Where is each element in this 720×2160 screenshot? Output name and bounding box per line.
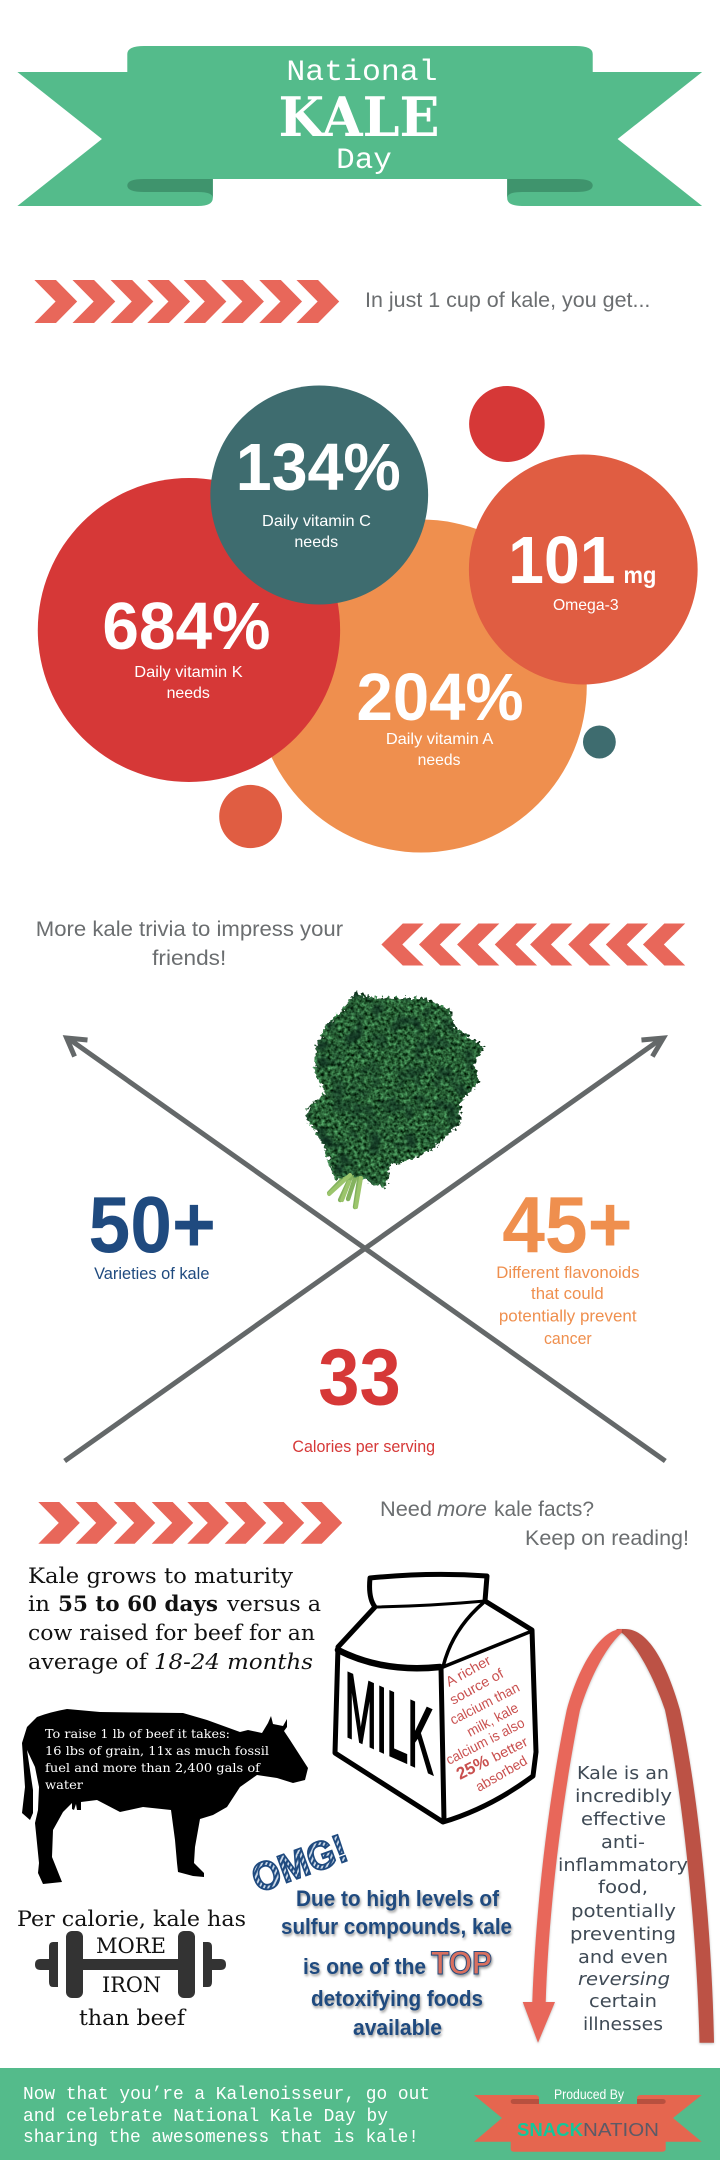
OMG callout: OMG! xyxy=(246,1827,353,1901)
cow text: To raise 1 lb of beef it takes: xyxy=(45,1727,230,1741)
arc text: inflammatory xyxy=(558,1855,688,1876)
cow text: fuel and more than 2,400 gals of xyxy=(45,1761,262,1775)
iron comparison xyxy=(17,1907,246,2030)
arc text: incredibly xyxy=(575,1786,672,1807)
producer ribbon xyxy=(474,2086,702,2152)
stat: flavonoids: potentially prevent xyxy=(499,1306,637,1326)
crossed arrows xyxy=(65,1038,665,1461)
anti-inflammatory arc arrow xyxy=(523,1629,714,2043)
producer ribbon: NATION xyxy=(583,2120,659,2140)
arc text: preventing xyxy=(570,1924,676,1945)
bubble: omega-3: Omega-3 xyxy=(553,597,619,614)
iron text top: Per calorie, kale has xyxy=(17,1907,246,1931)
bubble: vitamin C: Daily vitamin C xyxy=(262,513,371,530)
detox text xyxy=(281,1886,512,2040)
cow text: water xyxy=(45,1778,83,1792)
kale leaves xyxy=(306,992,484,1187)
stat: calories: 33 xyxy=(318,1333,401,1422)
calcium note: 25% xyxy=(453,1751,492,1784)
calcium note xyxy=(443,1652,531,1795)
more facts heading: Need xyxy=(380,1498,432,1521)
footer text: sharing the awesomeness that is kale! xyxy=(23,2128,419,2148)
trivia heading xyxy=(36,918,343,970)
kale stems xyxy=(329,1160,362,1207)
stat: calories: Calories per serving xyxy=(292,1437,435,1456)
bubble: vitamin A: Daily vitamin A xyxy=(386,731,494,748)
trivia heading: friends! xyxy=(152,947,226,970)
title banner xyxy=(17,46,702,206)
footer xyxy=(0,2068,720,2160)
text: kale maturity: cow raised for beef for an xyxy=(28,1621,315,1645)
arc text: food, xyxy=(598,1877,648,1898)
small coral dot xyxy=(219,785,282,848)
arc text: effective xyxy=(581,1809,666,1830)
text: kale maturity xyxy=(28,1564,321,1674)
detox text: detoxifying foods xyxy=(311,1986,483,2011)
bubble: vitamin A: needs xyxy=(418,752,460,769)
arc text: reversing xyxy=(578,1969,670,1990)
cow infographic xyxy=(22,1709,308,1884)
stat: flavonoids: cancer xyxy=(544,1329,592,1348)
chevron arrow row 1 xyxy=(34,280,339,323)
text: kale maturity: average of xyxy=(28,1650,149,1674)
stat: flavonoids xyxy=(496,1180,639,1348)
kale stems front xyxy=(329,1175,361,1207)
footer text: Now that you’re a Kalenoisseur, go out xyxy=(23,2085,430,2105)
icon: barbell xyxy=(35,1931,226,1998)
footer text: and celebrate National Kale Day by xyxy=(23,2107,388,2127)
milk carton infographic: MILK xyxy=(345,1653,433,1794)
logo: SnackNation: SNACK xyxy=(517,2120,583,2140)
text: kale maturity: versus a xyxy=(226,1592,321,1616)
arc arrow right side xyxy=(616,1629,714,2043)
text: kale maturity: 55 to 60 days xyxy=(58,1591,218,1616)
footer band xyxy=(0,2068,720,2160)
bubble: vitamin A: 204% xyxy=(357,661,524,735)
calcium note: absorbed xyxy=(472,1752,530,1795)
calcium note: better xyxy=(489,1733,531,1765)
more facts heading: Keep on reading! xyxy=(525,1527,689,1550)
icon: kale bunch xyxy=(306,992,484,1207)
title text: Day: Day xyxy=(336,143,392,177)
stat: flavonoids: Different flavonoids xyxy=(496,1263,639,1282)
chevron arrow row 3 xyxy=(38,1502,342,1544)
bubble: omega-3: 101 xyxy=(508,524,616,598)
arc text xyxy=(558,1763,688,2035)
stat: varieties: 50+ xyxy=(89,1180,216,1269)
arc text: certain xyxy=(589,1991,657,2012)
detox text: available xyxy=(353,2015,442,2040)
bubble: vitamin K: needs xyxy=(167,685,210,702)
bubble: vitamin K xyxy=(38,478,340,782)
bubble: vitamin C xyxy=(210,386,428,604)
iron text bottom: than beef xyxy=(79,2006,187,2030)
small teal dot xyxy=(583,726,616,758)
icon: cow silhouette xyxy=(22,1709,308,1884)
calcium note: milk, kale xyxy=(464,1699,521,1740)
iron text IRON: IRON xyxy=(102,1973,161,1997)
calcium note: calcium is also xyxy=(443,1714,527,1768)
bubble: vitamin C: 134% xyxy=(236,431,401,505)
bubble: vitamin K: Daily vitamin K xyxy=(134,664,243,681)
title text: National: National xyxy=(286,55,438,89)
bubble: omega-3: mg xyxy=(624,562,656,588)
footer text xyxy=(23,2085,430,2148)
stat: flavonoids: 45+ xyxy=(502,1180,633,1269)
text: kale maturity: Kale grows to maturity xyxy=(28,1564,293,1588)
arc text: Kale is an xyxy=(577,1763,669,1784)
text: kale maturity: in xyxy=(28,1592,50,1616)
arc text: anti- xyxy=(601,1832,645,1853)
detox text: Due to high levels of xyxy=(296,1886,500,1911)
arc text: and even xyxy=(578,1947,668,1968)
stat: calories xyxy=(292,1333,435,1456)
chevron arrow row 2 xyxy=(381,924,685,966)
banner ribbon xyxy=(17,46,702,206)
bubble chart xyxy=(38,386,698,852)
bubble: vitamin A xyxy=(256,520,587,852)
detox text: sulfur compounds, kale xyxy=(281,1914,512,1939)
more facts heading xyxy=(380,1498,689,1550)
arc text: illnesses xyxy=(583,2014,663,2035)
iron text MORE: MORE xyxy=(96,1934,166,1958)
more facts heading: kale facts? xyxy=(494,1498,594,1521)
arc text: potentially xyxy=(571,1901,676,1922)
cow text xyxy=(45,1727,269,1792)
title text: KALE: KALE xyxy=(278,85,440,149)
arc arrow left side xyxy=(523,1629,622,2043)
text: kale maturity: 18-24 months xyxy=(154,1650,313,1674)
icon: milk carton xyxy=(335,1574,536,1822)
detox text: TOP xyxy=(431,1945,492,1981)
calcium note: source of xyxy=(447,1665,506,1708)
small red dot xyxy=(469,386,545,462)
stat: flavonoids: that could xyxy=(531,1284,604,1303)
calcium note: A richer xyxy=(443,1652,494,1690)
trivia heading: More kale trivia to impress your xyxy=(36,918,343,941)
cow text: 16 lbs of grain, 11x as much fossil xyxy=(45,1744,269,1758)
stat: varieties: Varieties of kale xyxy=(94,1264,209,1283)
left ribbon fold xyxy=(127,179,213,198)
milk carton infographic xyxy=(335,1574,536,1822)
bubble: omega-3 xyxy=(469,454,698,684)
bubble: vitamin K: 684% xyxy=(102,590,271,664)
calcium note: calcium than xyxy=(447,1679,522,1728)
intro heading: In just 1 cup of kale, you get... xyxy=(365,289,650,312)
more facts heading: more xyxy=(437,1498,487,1521)
bubble: vitamin C: needs xyxy=(294,534,338,551)
right ribbon fold xyxy=(507,179,593,198)
produced by label: Produced By xyxy=(554,2086,624,2102)
detox text: is one of the xyxy=(303,1954,426,1979)
